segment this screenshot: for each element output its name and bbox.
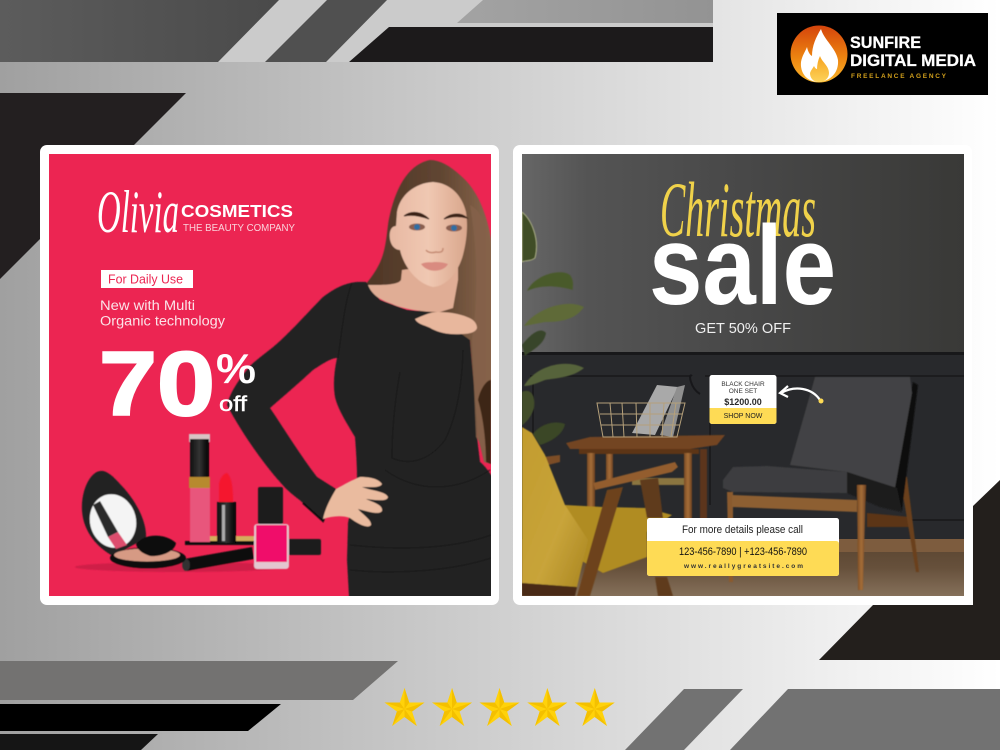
- eyebrows: [404, 212, 467, 219]
- product card: BLACK CHAIR: [721, 381, 765, 388]
- icon: star 2: [432, 688, 472, 726]
- yellow armchair: [522, 427, 678, 596]
- icon: star 3: [480, 688, 520, 726]
- arrow from chair to card: [780, 386, 824, 404]
- neck: [368, 262, 458, 312]
- woman figure: [227, 160, 493, 597]
- brand heading: COSMETICS: [181, 201, 293, 221]
- logo name: SUNFIRE: [850, 33, 921, 52]
- book in basket: [632, 385, 685, 437]
- logo tagline: FREELANCE AGENCY: [851, 73, 947, 80]
- hair strands on the right: [471, 206, 480, 442]
- icon: star 4: [527, 688, 567, 726]
- brand tagline: THE BEAUTY COMPANY: [183, 222, 295, 234]
- heading: sale: sale: [649, 203, 836, 328]
- product card: ONE SET: [729, 388, 757, 395]
- nail polish: [254, 487, 289, 569]
- plant leaves: [522, 212, 584, 445]
- left black wedge: [0, 93, 186, 279]
- nose: [426, 248, 443, 253]
- badge: for daily use: For Daily Use: [108, 272, 183, 286]
- bottom left bars: [0, 661, 398, 750]
- wooden table: [566, 435, 725, 523]
- off label: off: [219, 393, 247, 416]
- room wall: [522, 154, 964, 352]
- logo name second line: DIGITAL MEDIA: [850, 51, 976, 70]
- contact card: [647, 518, 839, 576]
- top decorative bars: [0, 0, 713, 62]
- powder puff: [136, 536, 176, 556]
- lipstick: [217, 473, 236, 543]
- description text: Organic technology: [100, 314, 225, 328]
- floor: [522, 539, 964, 596]
- hair: [366, 160, 493, 464]
- bottom right bars: [625, 689, 1000, 750]
- compact mirror: [82, 471, 146, 556]
- top light band: [0, 0, 713, 62]
- description text: [100, 298, 225, 328]
- panel: Olivia Cosmetics ad: [40, 145, 499, 605]
- right black wedge: [819, 480, 1000, 660]
- lower wall panelling: [522, 352, 964, 542]
- product card: [710, 375, 776, 424]
- raised hand: [415, 312, 477, 334]
- hand on hip: [323, 477, 388, 526]
- badge: for daily use: [101, 270, 193, 288]
- brand script name: Olivia: [97, 179, 179, 245]
- lips: [421, 262, 448, 271]
- panel: Christmas sale ad: Christmas: [660, 166, 816, 253]
- discount figure 70: 70: [99, 334, 215, 435]
- cosmetics group: [75, 434, 321, 572]
- lip gloss: [189, 434, 210, 542]
- icon: flame in circle: [790, 26, 848, 82]
- panel: Christmas sale ad: [513, 145, 972, 605]
- contact card: www.reallygreatsite.com: [683, 563, 803, 570]
- product card: SHOP NOW: [724, 413, 763, 420]
- wire basket: [597, 403, 685, 437]
- eyes: [409, 224, 462, 232]
- percent sign: %: [216, 345, 256, 392]
- dress folds: [351, 282, 491, 472]
- mascara tube: [182, 536, 321, 571]
- five star rating: [384, 688, 615, 726]
- dark armchair: [723, 377, 919, 590]
- contact card: 123-456-7890 | +123-456-7890: [679, 546, 807, 558]
- logo: Sunfire Digital Media: [777, 13, 988, 95]
- icon: star 5: [575, 688, 615, 726]
- face: [390, 182, 467, 287]
- powder base: [110, 548, 186, 568]
- product card: $1200.00: [724, 397, 762, 407]
- icon: star 1: [384, 688, 424, 726]
- dress and arm: [227, 282, 493, 597]
- offer line: GET 50% OFF: [695, 321, 791, 337]
- description text: New with Multi: [100, 298, 195, 313]
- contact card: For more details please call: [682, 524, 803, 536]
